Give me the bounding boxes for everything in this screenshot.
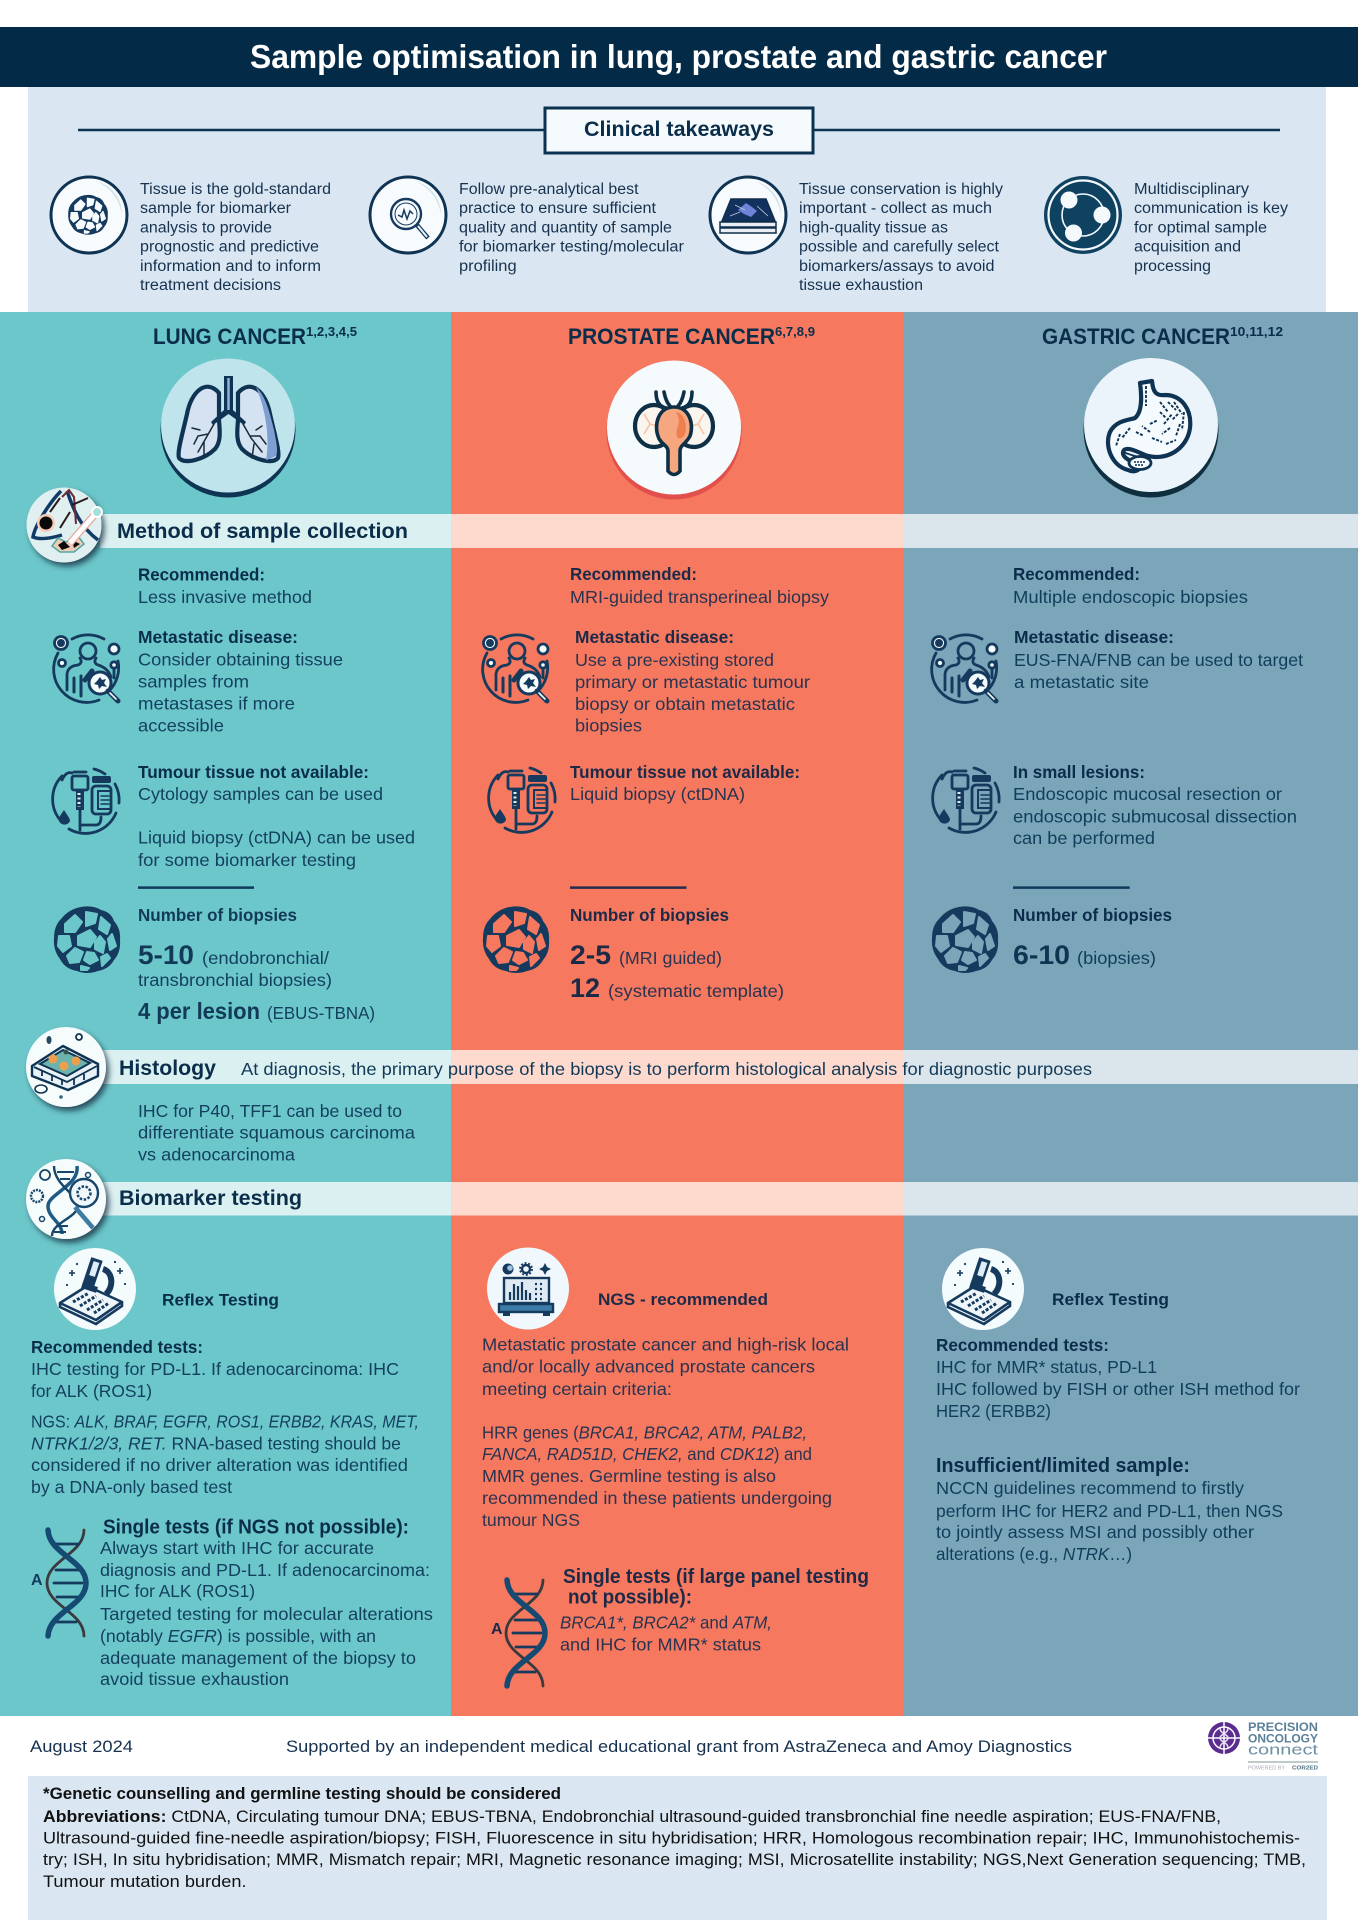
text: takeaway 3 [799, 181, 1003, 294]
text: gastric insufficient sample: alterations (e.g., NTRK…) [936, 1544, 1132, 1564]
text: prostate collection: Liquid biopsy (ctDNA) [570, 784, 745, 804]
band: histology: At diagnosis, the primary purpose of the biopsy is to perform histological analysis for diagnostic purposes [241, 1059, 1092, 1079]
band: biomarker testing: Biomarker testing [119, 1186, 302, 1210]
title banner [0, 27, 1358, 87]
text: lung collection: (endobronchial/ [202, 948, 329, 968]
text: gastric collection: EUS-FNA/FNB can be used to target [1014, 650, 1303, 670]
text: gastric insufficient sample: perform IHC for HER2 and PD-L1, then NGS [936, 1501, 1283, 1521]
text: abbreviations list: try; ISH, In situ hybridisation; MMR, Mismatch repair; MRI, Magnetic resonance imaging; MSI, Microsatellite instability; NGS,Next Generation sequencing; TMB, [43, 1851, 1306, 1869]
band: histology [100, 1050, 1358, 1084]
icon: lungs [160, 358, 296, 498]
text: prostate collection: MRI-guided transperineal biopsy [570, 587, 829, 607]
text: genetic counselling note: *Genetic counselling and germline testing should be considered [43, 1785, 561, 1803]
text: takeaway 4: acquisition and [1134, 239, 1241, 256]
label: reflex testing gastric: Reflex Testing [1052, 1291, 1169, 1309]
text: gastric collection: Recommended: [1013, 564, 1140, 584]
text: gastric collection [1013, 564, 1303, 970]
text: gastric collection: can be performed [1013, 828, 1155, 848]
text: gastric recommended tests: HER2 (ERBB2) [936, 1401, 1051, 1421]
text: prostate collection: biopsies [575, 716, 642, 736]
icon: reflex testing lung [54, 1248, 136, 1330]
text: lung single tests: adequate management of the biopsy to [100, 1648, 416, 1668]
band: histology: Histology [119, 1056, 216, 1080]
text: prostate collection: biopsy or obtain metastatic [575, 694, 795, 714]
icon: dna prostate [491, 1580, 545, 1686]
text: lung collection: samples from [138, 672, 249, 692]
text: gastric collection: Number of biopsies [1013, 905, 1172, 925]
heading: lung cancer: LUNG CANCER [153, 324, 306, 349]
text: prostate collection: Use a pre-existing stored [575, 650, 774, 670]
icon: metastatic disease gastric [932, 635, 997, 702]
text: lung collection: Consider obtaining tissue [138, 650, 343, 670]
text: gastric collection: Multiple endoscopic biopsies [1013, 587, 1248, 607]
text: lung single tests: Always start with IHC for accurate [100, 1538, 374, 1558]
icon: dna lung [31, 1530, 86, 1636]
heading: gastric cancer: GASTRIC CANCER [1042, 324, 1230, 349]
text: prostate ngs criteria: meeting certain criteria: [482, 1379, 672, 1399]
text: takeaway 2: for biomarker testing/molecular [459, 239, 684, 256]
logo: precision oncology connect [1207, 1720, 1319, 1772]
text: prostate ngs criteria: HRR genes (BRCA1, BRCA2, ATM, PALB2, [482, 1422, 807, 1442]
icon: reflex testing gastric [942, 1248, 1024, 1330]
text: lung collection: (EBUS-TBNA) [267, 1003, 375, 1023]
icon: biopsies lung [54, 906, 120, 973]
text: prostate ngs criteria: MMR genes. Germline testing is also [482, 1466, 776, 1486]
icon: ngs instrument [487, 1248, 569, 1330]
text: lung collection: accessible [138, 716, 224, 736]
panel: gastric column background [904, 312, 1358, 1716]
text: gastric collection: endoscopic submucosal dissection [1013, 806, 1297, 826]
text: lung collection: Liquid biopsy (ctDNA) can be used [138, 828, 415, 848]
text: prostate single tests: not possible): [568, 1586, 692, 1608]
text: takeaway 2: Follow pre-analytical best [459, 181, 639, 198]
text: lung single tests: Single tests (if NGS not possible): [103, 1516, 409, 1538]
text: lung single tests: IHC for ALK (ROS1) [100, 1581, 255, 1601]
text: lung collection [138, 564, 415, 1024]
text: lung recommended tests: for ALK (ROS1) [31, 1381, 152, 1401]
text: lung histology [138, 1101, 415, 1164]
text: lung recommended tests: NTRK1/2/3, RET. RNA-based testing should be [31, 1434, 401, 1454]
text: gastric insufficient sample: to jointly assess MSI and possibly other [936, 1522, 1254, 1542]
text: lung collection: Metastatic disease: [138, 627, 298, 647]
icon: dna prostate: A [491, 1621, 503, 1638]
title banner: Sample optimisation in lung, prostate and gastric cancer [250, 38, 1107, 75]
text: abbreviations list: Tumour mutation burden. [43, 1873, 246, 1891]
text: gastric insufficient sample: Insufficient/limited sample: [936, 1455, 1190, 1477]
logo: precision oncology connect: connect [1248, 1742, 1319, 1758]
text: lung recommended tests: IHC testing for PD-L1. If adenocarcinoma: IHC [31, 1359, 399, 1379]
text: lung histology: differentiate squamous carcinoma [138, 1122, 415, 1142]
icon: tissue slides [710, 177, 786, 253]
text: gastric insufficient sample [936, 1455, 1283, 1564]
text: lung single tests [100, 1516, 433, 1689]
icon: stomach [1084, 358, 1218, 498]
text: prostate ngs criteria: tumour NGS [482, 1510, 580, 1530]
panel: abbreviations [28, 1776, 1327, 1920]
text: lung single tests: diagnosis and PD-L1. If adenocarcinoma: [100, 1560, 430, 1580]
heading: lung cancer: 1,2,3,4,5 [306, 325, 357, 339]
text: lung collection: Recommended: [138, 564, 265, 584]
text: gastric collection: Endoscopic mucosal resection or [1013, 784, 1282, 804]
text: takeaway 2: quality and quantity of sample [459, 220, 672, 236]
text: takeaway 4: Multidisciplinary [1134, 181, 1249, 198]
text: lung single tests: avoid tissue exhaustion [100, 1669, 289, 1689]
heading: clinical takeaways [545, 108, 813, 153]
band: biomarker testing [100, 1182, 1358, 1216]
icon: metastatic disease prostate [483, 635, 548, 702]
icon: biomarker dna magnifier [26, 1159, 106, 1239]
text: lung collection: metastases if more [138, 694, 295, 714]
text: prostate single tests: Single tests (if large panel testing [563, 1566, 869, 1588]
text: lung collection: 5-10 [138, 940, 194, 970]
panel: lung column background [0, 312, 451, 1716]
text: lung collection: 4 per lesion [138, 998, 260, 1024]
icon: liquid biopsy lung [53, 769, 119, 833]
icon: histology slide [26, 1027, 106, 1107]
icon: dna lung: A [31, 1572, 43, 1589]
text: gastric collection: In small lesions: [1013, 762, 1145, 782]
text: gastric recommended tests: Recommended tests: [936, 1335, 1109, 1355]
icon: prostate [606, 360, 742, 500]
logo: precision oncology connect: COR2ED [1292, 1766, 1318, 1772]
icon: magnifier [370, 177, 446, 253]
text: lung histology: IHC for P40, TFF1 can be used to [138, 1101, 402, 1121]
text: prostate ngs criteria: Metastatic prostate cancer and high-risk local [482, 1335, 849, 1355]
text: prostate single tests [560, 1566, 869, 1654]
text: takeaway 1: analysis to provide [140, 220, 272, 236]
text: gastric collection: Metastatic disease: [1014, 627, 1174, 647]
text: takeaway 4: communication is key [1134, 200, 1288, 217]
text: takeaway 1: information and to inform [140, 258, 321, 275]
icon: sample collection [26, 488, 102, 562]
text: lung recommended tests: by a DNA-only based test [31, 1477, 232, 1497]
text: lung recommended tests [31, 1337, 419, 1497]
band: method of sample collection [100, 514, 1358, 548]
text: abbreviations list: Abbreviations: CtDNA, Circulating tumour DNA; EBUS-TBNA, Endobronchial ultrasound-guided transbronchial fine needle aspiration; EUS-FNA/FNB, [43, 1808, 1221, 1826]
heading: prostate cancer: PROSTATE CANCER [568, 324, 775, 349]
text: prostate ngs criteria: and/or locally advanced prostate cancers [482, 1357, 815, 1377]
text: prostate collection: 12 [570, 973, 600, 1003]
text: takeaway 2: practice to ensure sufficient [459, 200, 657, 217]
text: prostate single tests: and IHC for MMR* status [560, 1634, 761, 1654]
icon: metastatic disease lung [54, 635, 119, 702]
band: method of sample collection: Method of sample collection [117, 519, 408, 543]
text: takeaway 2: profiling [459, 258, 517, 275]
heading: prostate cancer: 6,7,8,9 [775, 325, 815, 339]
text: lung recommended tests: considered if no driver alteration was identified [31, 1455, 408, 1475]
text: lung recommended tests: NGS: ALK, BRAF, EGFR, ROS1, ERBB2, KRAS, MET, [31, 1412, 419, 1432]
text: prostate collection: Recommended: [570, 564, 697, 584]
footer sponsor statement: Supported by an independent medical educational grant from AstraZeneca and Amoy Diagnostics [286, 1738, 1072, 1756]
text: prostate collection: Tumour tissue not available: [570, 762, 800, 782]
text: lung collection: for some biomarker testing [138, 850, 356, 870]
text: takeaway 3: possible and carefully select [799, 239, 1000, 256]
text: prostate ngs criteria: recommended in these patients undergoing [482, 1488, 832, 1508]
text: takeaway 3: tissue exhaustion [799, 277, 923, 294]
icon: liquid biopsy gastric [933, 768, 999, 832]
text: takeaway 1: Tissue is the gold-standard [140, 181, 331, 198]
text: lung collection: Tumour tissue not available: [138, 762, 369, 782]
text: prostate ngs criteria: FANCA, RAD51D, CHEK2, and CDK12) and [482, 1444, 812, 1464]
text: takeaway 3: biomarkers/assays to avoid [799, 258, 994, 275]
text: prostate collection: primary or metastatic tumour [575, 672, 810, 692]
panel: clinical takeaways [28, 87, 1326, 312]
text: lung collection: Number of biopsies [138, 905, 297, 925]
text: takeaway 3: high-quality tissue as [799, 220, 948, 236]
text: takeaway 4 [1134, 181, 1288, 275]
text: gastric recommended tests [936, 1335, 1300, 1421]
text: takeaway 4: for optimal sample [1134, 220, 1267, 236]
text: lung collection: Less invasive method [138, 587, 312, 607]
text: lung histology: vs adenocarcinoma [138, 1144, 295, 1164]
text: lung single tests: (notably EGFR) is possible, with an [100, 1626, 376, 1646]
logo: precision oncology connect: POWERED BY [1248, 1766, 1285, 1772]
text: prostate single tests: BRCA1*, BRCA2* and ATM, [560, 1612, 772, 1632]
heading: gastric cancer: 10,11,12 [1230, 325, 1283, 339]
text: lung collection: Cytology samples can be used [138, 784, 383, 804]
text: lung recommended tests: Recommended tests: [31, 1337, 203, 1357]
text: abbreviations list: Ultrasound-guided fine-needle aspiration/biopsy; FISH, Fluorescence in situ hybridisation; HRR, Homologous recombination repair; IHC, Immunohistochemis- [43, 1830, 1300, 1848]
text: takeaway 1 [140, 181, 331, 294]
text: abbreviations list [43, 1808, 1306, 1891]
icon: biopsies prostate [483, 906, 549, 973]
footer date: August 2024 [30, 1738, 133, 1756]
icon: communication network [1044, 176, 1122, 254]
text: takeaway 4: processing [1134, 258, 1211, 275]
text: takeaway 1: prognostic and predictive [140, 239, 319, 256]
logo: precision oncology connect: PRECISION [1248, 1720, 1318, 1734]
text: prostate collection: Metastatic disease: [575, 627, 734, 647]
text: gastric collection: a metastatic site [1014, 672, 1149, 692]
text: gastric recommended tests: IHC followed by FISH or other ISH method for [936, 1379, 1300, 1399]
text: lung single tests: Targeted testing for molecular alterations [100, 1604, 433, 1624]
text: prostate collection: Number of biopsies [570, 905, 729, 925]
text: gastric recommended tests: IHC for MMR* status, PD-L1 [936, 1357, 1157, 1377]
icon: liquid biopsy prostate [489, 768, 555, 832]
text: prostate ngs criteria [482, 1335, 849, 1530]
text: prostate collection [570, 564, 829, 1003]
text: takeaway 3: important - collect as much [799, 200, 992, 217]
icon: tissue cell [51, 177, 127, 253]
text: gastric insufficient sample: NCCN guidelines recommend to firstly [936, 1478, 1244, 1498]
heading: clinical takeaways: Clinical takeaways [584, 117, 774, 141]
label: ngs recommended: NGS - recommended [598, 1291, 768, 1309]
text: takeaway 3: Tissue conservation is highly [799, 181, 1003, 198]
label: reflex testing lung: Reflex Testing [162, 1292, 279, 1310]
text: prostate collection: (MRI guided) [619, 948, 722, 968]
text: takeaway 1: sample for biomarker [140, 200, 291, 217]
icon: biopsies gastric [932, 906, 998, 973]
text: gastric collection: 6-10 [1013, 940, 1070, 970]
text: gastric collection: (biopsies) [1077, 948, 1156, 968]
panel: prostate column background [451, 312, 904, 1716]
logo: precision oncology connect: ONCOLOGY [1248, 1732, 1318, 1746]
text: takeaway 1: treatment decisions [140, 277, 281, 294]
text: lung collection: transbronchial biopsies) [138, 970, 332, 990]
text: takeaway 2 [459, 181, 684, 275]
text: prostate collection: (systematic template) [608, 981, 784, 1001]
text: prostate collection: 2-5 [570, 940, 611, 970]
